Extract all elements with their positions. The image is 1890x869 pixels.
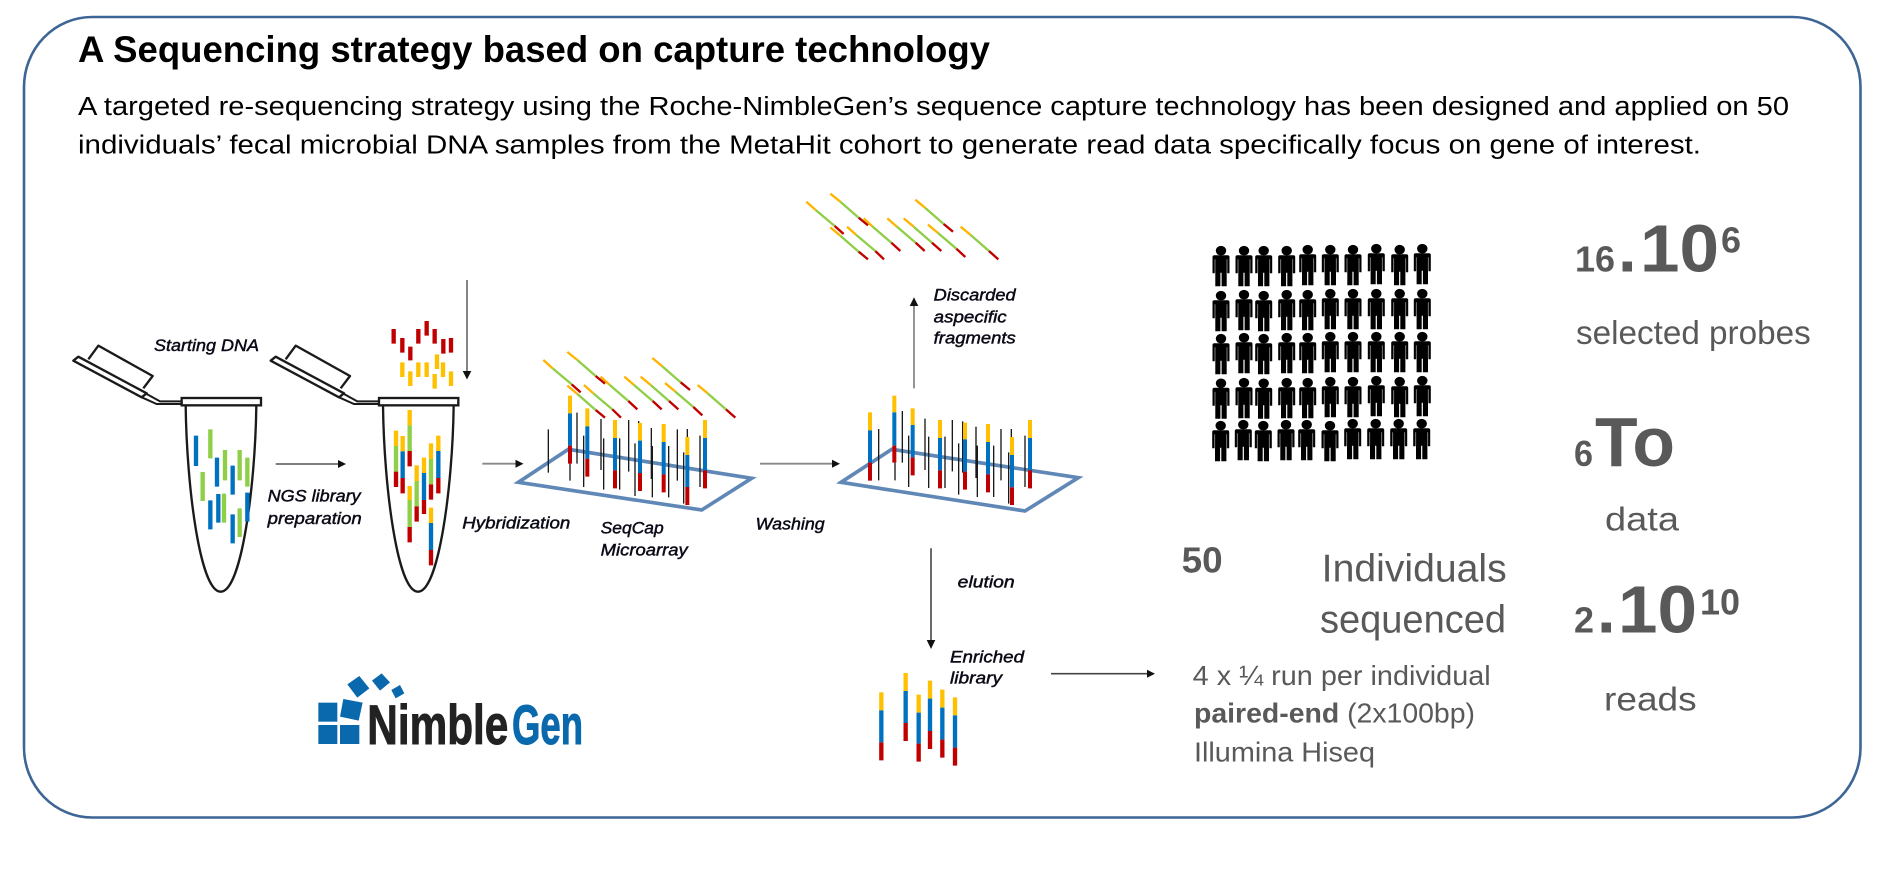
stat: 50 individuals — [1182, 539, 1507, 641]
arrow: down into second tube — [463, 280, 471, 380]
number: 2.10^10: . — [1597, 573, 1616, 648]
label: Discarded aspecific fragments: aspecific — [934, 309, 1008, 327]
arrow: tube to microarray — [482, 460, 524, 468]
number: 16.10^6 — [1575, 212, 1741, 287]
number: 6 To: To — [1595, 403, 1675, 481]
icon: logo squares — [318, 673, 404, 744]
intro text block: individuals’ fecal microbial DNA samples from the MetaHit cohort to generate read data specifically focus on gene of interest. — [78, 131, 1701, 159]
label: Discarded aspecific fragments: fragments — [934, 329, 1016, 347]
text block: run details: 4 x ¼ run per individual — [1193, 660, 1491, 691]
label: selected probes: selected probes — [1576, 314, 1811, 351]
number: 2.10^10: 2 — [1574, 600, 1594, 641]
icon: discarded aspecific fragments — [806, 194, 998, 259]
logo wordmark: Nimble — [367, 693, 508, 756]
stat: selected probes — [1575, 212, 1811, 351]
title: A Sequencing strategy based on capture technology — [78, 29, 990, 70]
icon: grid of 50 people — [1212, 244, 1431, 461]
label: Individuals sequenced: sequenced — [1320, 598, 1506, 641]
number: 2.10^10 — [1574, 573, 1740, 648]
label: NGS library preparation: NGS library — [268, 488, 363, 506]
number: 6 To: 6 — [1574, 433, 1593, 474]
text block: run details — [1193, 660, 1491, 768]
logo: NimbleGen — [318, 673, 583, 756]
label: NGS library preparation — [267, 488, 363, 528]
label: Starting DNA: Starting DNA — [154, 337, 259, 355]
label: Individuals sequenced — [1320, 548, 1507, 641]
stat: data volume — [1574, 403, 1680, 538]
panel: capture workflow diagram — [73, 194, 1155, 766]
logo wordmark: Gen — [512, 693, 583, 756]
number: 16.10^6: 6 — [1721, 219, 1741, 260]
number: 2.10^10: 10 — [1618, 573, 1697, 648]
arrow: elution downward — [927, 548, 935, 649]
icon: microarray after washing — [841, 396, 1078, 511]
label: SeqCap Microarray: Microarray — [601, 542, 690, 560]
number: 16.10^6: . — [1618, 212, 1637, 287]
label: Enriched library — [950, 648, 1025, 687]
number: 16.10^6: 16 — [1575, 239, 1615, 280]
text block: run details: paired-end (2x100bp) — [1194, 697, 1475, 728]
arrow: tube to tube — [276, 460, 346, 468]
arrow: discard upward — [910, 297, 918, 388]
label: data: data — [1605, 501, 1680, 538]
icon: tube with library and adapters — [271, 321, 458, 592]
text block: run details: Illumina Hiseq — [1194, 737, 1375, 768]
label: NGS library preparation: preparation — [267, 510, 362, 528]
stat: reads — [1574, 573, 1740, 718]
label: Individuals sequenced: Individuals — [1322, 548, 1507, 591]
intro text block — [78, 93, 1789, 159]
intro text block: A targeted re-sequencing strategy using the Roche-NimbleGen’s sequence capture technology has been designed and applied on 50 — [78, 93, 1789, 121]
arrow: library to sequencing — [1051, 670, 1155, 678]
label: Enriched library: Enriched — [950, 648, 1025, 666]
label: Discarded aspecific fragments — [934, 287, 1017, 347]
icon: SeqCap microarray with probes — [518, 352, 752, 510]
label: Enriched library: library — [950, 669, 1004, 687]
label: Hybridization: Hybridization — [462, 514, 570, 532]
label: Discarded aspecific fragments: Discarded — [934, 287, 1017, 305]
label: SeqCap Microarray: SeqCap — [601, 519, 664, 537]
icon: tube with starting DNA — [73, 346, 261, 592]
label: SeqCap Microarray — [601, 519, 690, 560]
number: 50: 50 — [1182, 539, 1223, 580]
number: 2.10^10: 10 — [1700, 581, 1740, 622]
label: reads: reads — [1604, 681, 1697, 718]
number: 16.10^6: 10 — [1640, 212, 1719, 287]
icon: enriched library fragments — [881, 673, 955, 766]
arrow: microarray to washing — [760, 460, 840, 468]
label: Washing: Washing — [756, 515, 826, 533]
label: elution: elution — [958, 574, 1015, 592]
